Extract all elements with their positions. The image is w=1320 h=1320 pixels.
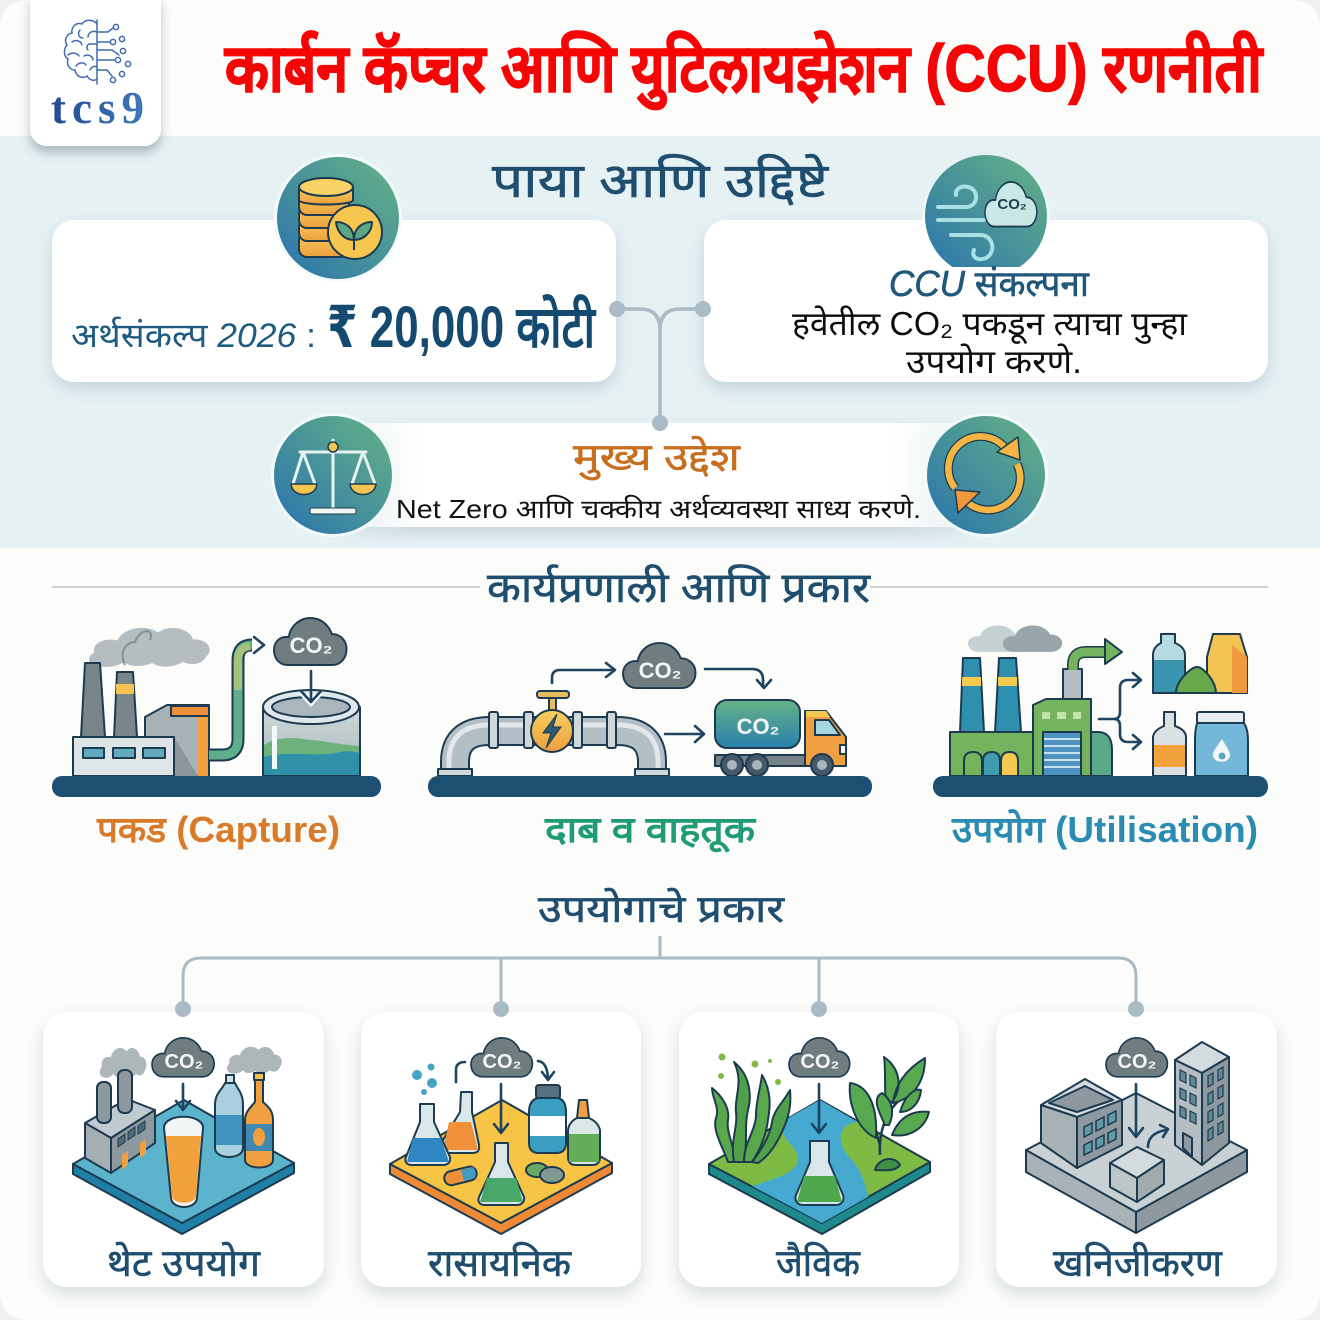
illustration: utilisation	[933, 626, 1268, 797]
illustration: compression and transport: CO₂	[737, 714, 779, 739]
panel: mineralisation	[996, 1012, 1277, 1287]
illustration: direct use	[73, 1038, 294, 1234]
logo wordmark: tcs9	[51, 83, 144, 133]
budget label: अर्थसंकल्प 2026 :	[71, 316, 316, 355]
label: capture: पकड (Capture)	[96, 809, 340, 850]
foundations band background	[0, 136, 1320, 548]
illustration: compression and transport: CO₂	[639, 658, 681, 683]
heading: process and types: कार्यप्रणाली आणि प्रकार	[487, 564, 871, 611]
illustration: chemical: CO₂	[483, 1051, 521, 1073]
icon: wind and CO2	[922, 155, 1050, 277]
illustration: mineralisation: CO₂	[1118, 1051, 1156, 1073]
illustration: capture	[52, 618, 381, 797]
label: chemical: रासायनिक	[428, 1241, 572, 1285]
illustration: compression and transport	[428, 643, 872, 797]
objective heading: मुख्य उद्देश	[573, 435, 742, 481]
panel: direct use	[43, 1012, 324, 1287]
panel: biological	[679, 1012, 959, 1287]
icon: balance scale	[271, 413, 395, 537]
logo card	[30, 0, 161, 146]
illustration: biological	[709, 1038, 930, 1234]
heading: types of utilisation: उपयोगाचे प्रकार	[538, 887, 786, 931]
label: compression and transport: दाब व वाहतूक	[544, 809, 757, 853]
budget amount: ₹ 20,000 कोटी	[327, 294, 596, 360]
illustration: direct use: CO₂	[165, 1051, 203, 1073]
concept heading: CCU संकल्पना	[889, 263, 1090, 304]
illustration: mineralisation	[1026, 1038, 1247, 1233]
icon: circular arrows	[924, 413, 1048, 537]
panel: budget	[52, 154, 616, 382]
concept text: उपयोग करणे.	[906, 343, 1082, 380]
illustration: biological: CO₂	[801, 1051, 839, 1073]
icon: coins and leaf	[274, 154, 402, 282]
connector tree	[175, 936, 1144, 1017]
concept text: हवेतील CO₂ पकडून त्याचा पुन्हा	[792, 305, 1188, 345]
icon: wind and CO2: CO₂	[997, 196, 1027, 213]
panel: main objective	[271, 413, 1048, 537]
heading: foundations and objectives: पाया आणि उद्दिष्टे	[492, 153, 829, 208]
panel: CCU concept	[704, 155, 1268, 382]
label: biological: जैविक	[776, 1241, 861, 1285]
icon: brain circuit	[64, 20, 131, 84]
panel: chemical	[361, 1012, 641, 1287]
label: direct use: थेट उपयोग	[107, 1241, 261, 1285]
label: utilisation: उपयोग (Utilisation)	[951, 809, 1258, 850]
objective text: Net Zero आणि चक्कीय अर्थव्यवस्था साध्य करणे.	[396, 494, 921, 524]
label: mineralisation: खनिजीकरण	[1053, 1241, 1223, 1285]
illustration: capture: CO₂	[290, 633, 332, 658]
connector: cards to objective	[609, 301, 711, 431]
illustration: chemical	[390, 1038, 612, 1234]
